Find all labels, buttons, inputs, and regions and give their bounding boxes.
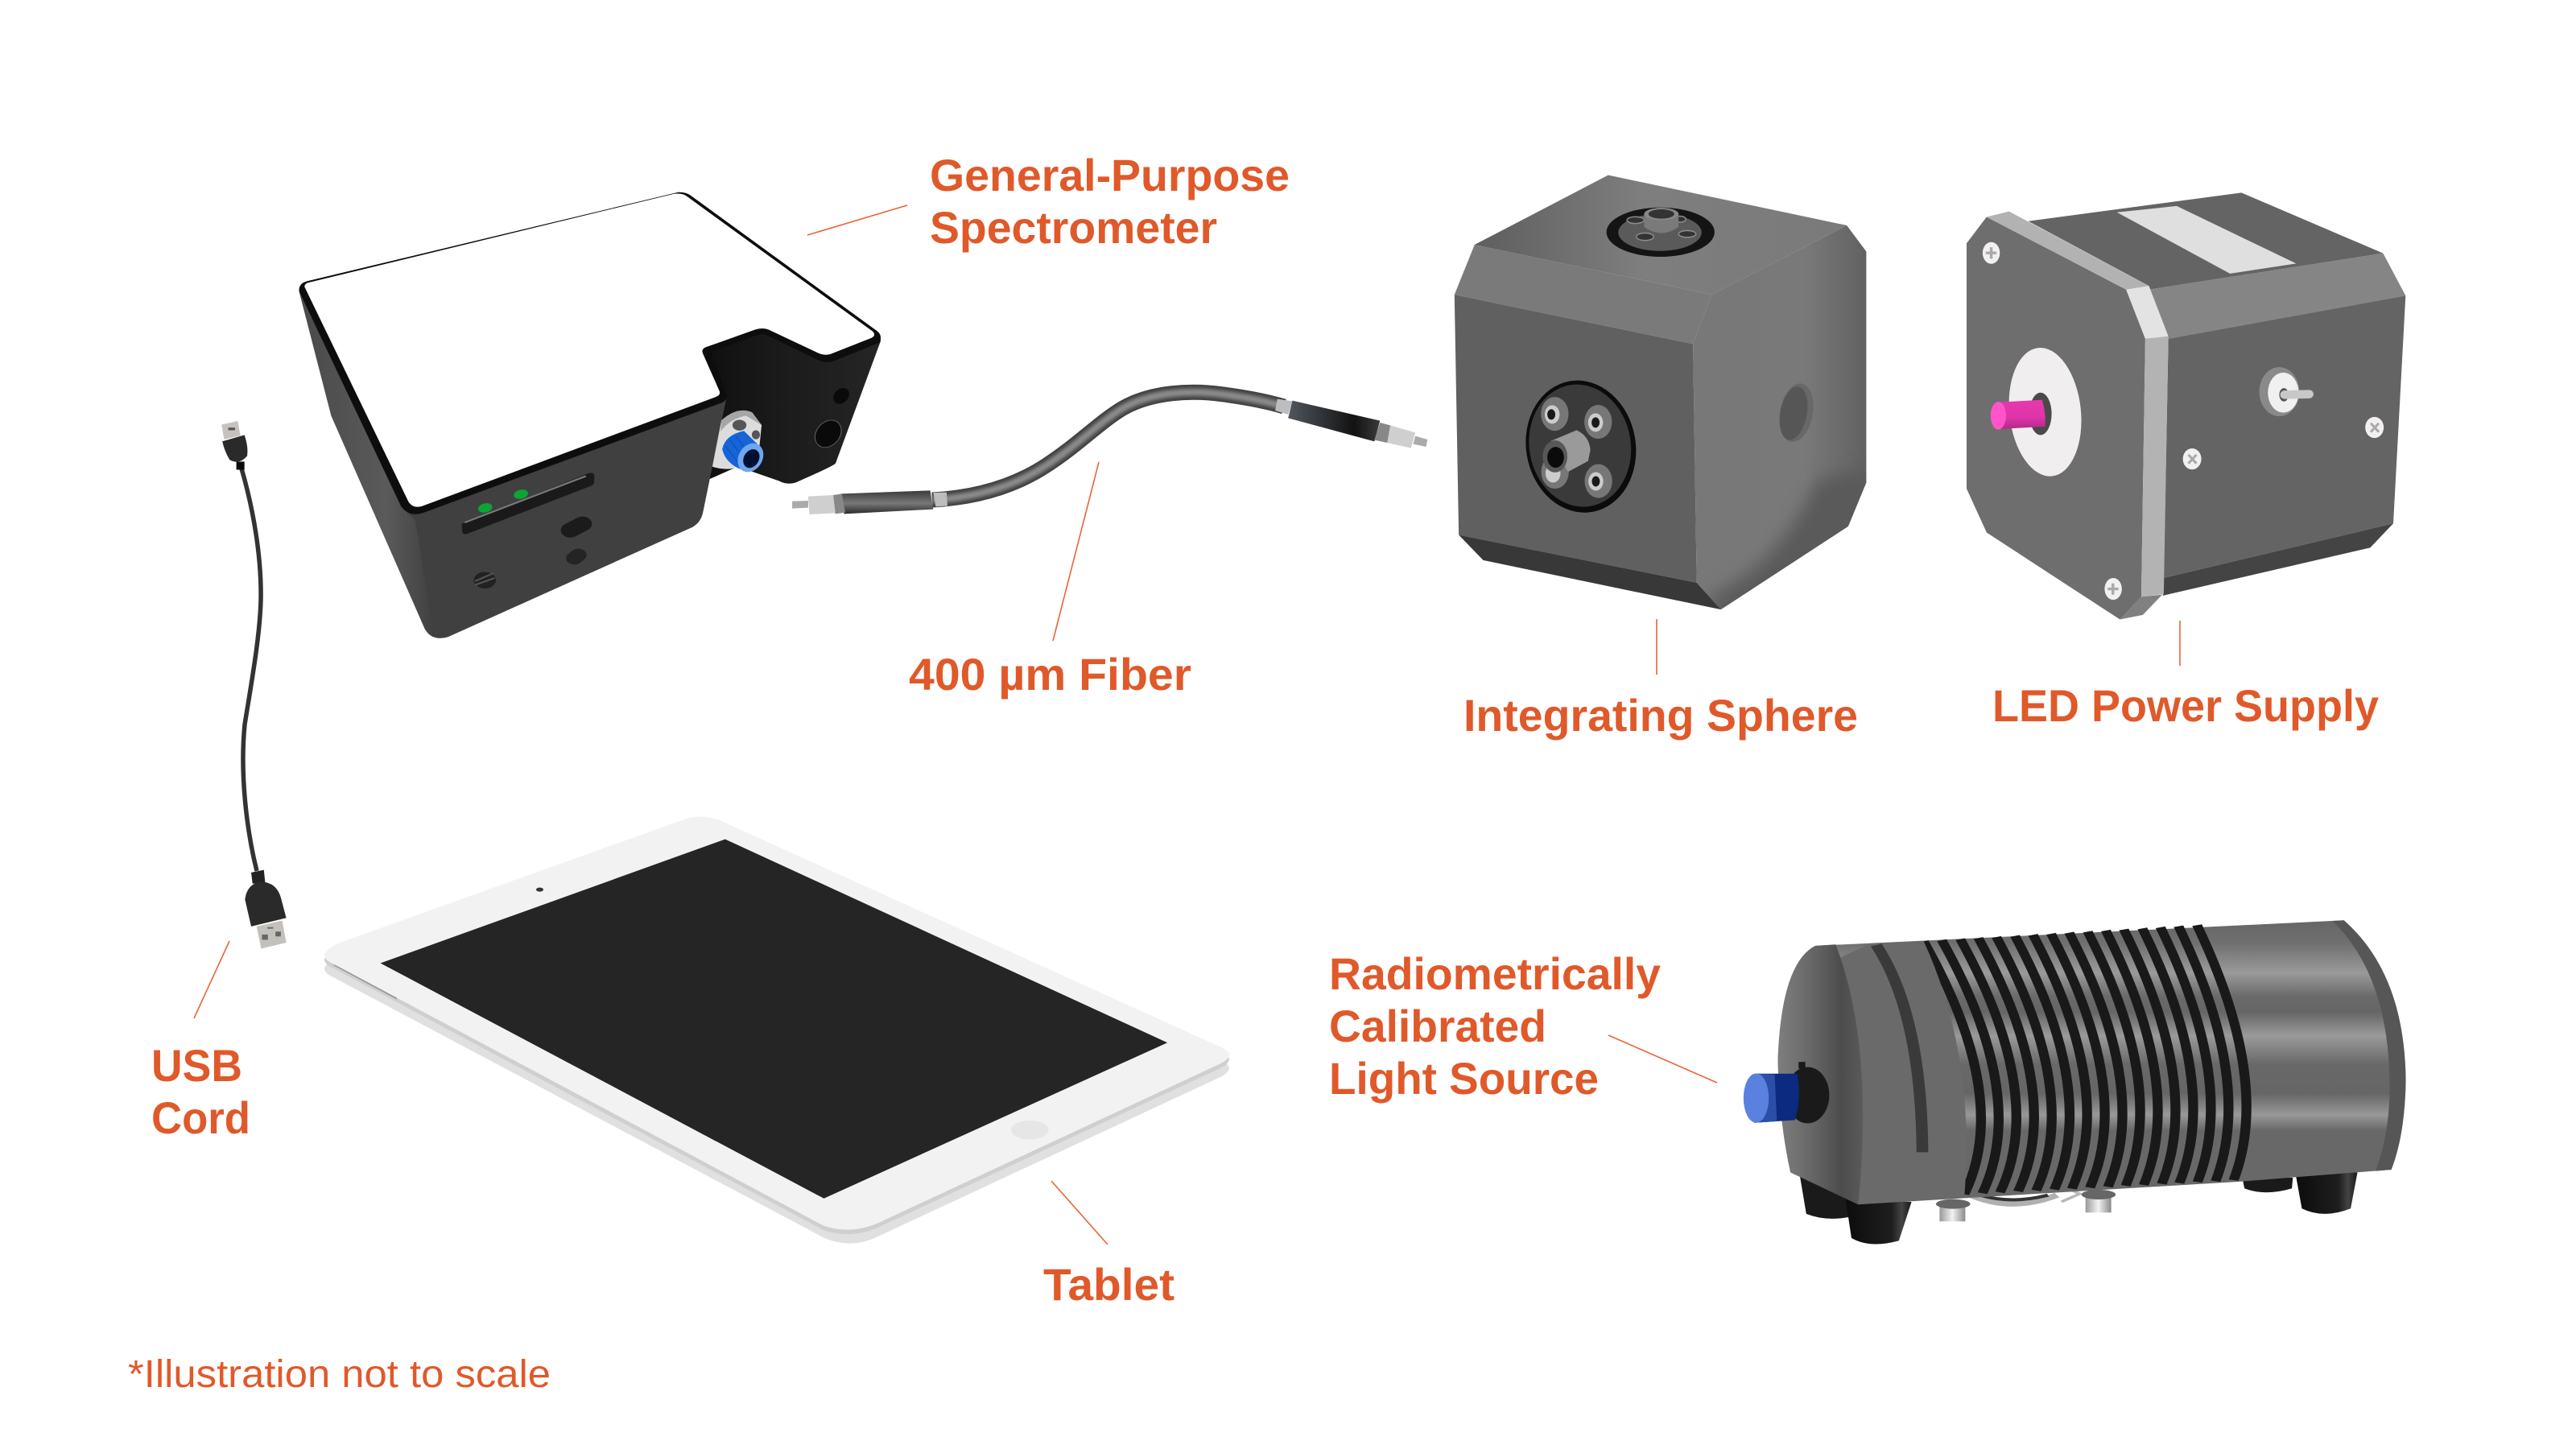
supply front face xyxy=(1967,217,2145,620)
label: light source: Calibrated xyxy=(1329,1001,1546,1051)
sphere top port xyxy=(1607,208,1715,257)
cylinder rear rim xyxy=(2333,920,2406,1171)
leader: light source xyxy=(1608,1035,1717,1083)
sphere right face xyxy=(1693,225,1866,609)
port small xyxy=(574,555,579,558)
label: USB cord: USB xyxy=(151,1040,242,1091)
mounting pins and clip xyxy=(1936,1190,2116,1221)
slot highlight xyxy=(464,476,586,522)
magenta knob xyxy=(1991,400,2046,430)
flange lower edge xyxy=(2120,595,2162,620)
radiometric light source xyxy=(1744,920,2406,1245)
rear small hole xyxy=(831,386,852,406)
spectrometer left side xyxy=(299,291,434,637)
tablet xyxy=(324,816,1229,1244)
collar groove xyxy=(1876,945,1922,1152)
front face xyxy=(1777,944,1863,1204)
LED right xyxy=(512,488,530,501)
label: USB cord: Cord xyxy=(151,1092,250,1143)
lamp cylinder body xyxy=(1777,920,2406,1204)
sphere bottom chamfer xyxy=(1459,535,1721,609)
sphere right face shading xyxy=(1708,467,1866,609)
leader: spectrometer xyxy=(807,205,907,235)
label: tablet: Tablet xyxy=(1043,1259,1174,1310)
end collar xyxy=(1833,941,1967,1204)
label: integrating sphere: Integrating Sphere xyxy=(1463,690,1858,741)
LED left xyxy=(476,502,494,514)
fiber left connector xyxy=(792,490,947,514)
sphere upper chamfer xyxy=(1455,245,1711,344)
rear big hole xyxy=(811,417,846,450)
USB A connector xyxy=(245,870,287,948)
label: General-Purpose Spectrometer: Spectrometer xyxy=(930,202,1217,253)
leader: tablet xyxy=(1051,1181,1108,1245)
supply top face xyxy=(2029,192,2383,290)
flange right edge xyxy=(2141,336,2169,597)
tablet screen xyxy=(381,840,1167,1199)
label: light source: Light Source xyxy=(1329,1053,1599,1104)
blue fiber connector xyxy=(722,431,767,474)
fiber port flange xyxy=(712,411,762,469)
rear feet xyxy=(2242,1172,2357,1214)
USB cable wire xyxy=(242,469,261,871)
tablet lower-left dark sliver xyxy=(333,962,397,1000)
leader: USB xyxy=(194,941,229,1018)
tablet home button xyxy=(1011,1121,1049,1140)
footnote: *Illustration not to scale xyxy=(128,1353,551,1396)
screw side left xyxy=(2183,448,2202,469)
front feet xyxy=(1799,1174,1912,1245)
port pill xyxy=(570,524,583,530)
blue knob assembly xyxy=(1744,1062,1829,1123)
screw hole xyxy=(473,572,496,588)
shaft hole xyxy=(2029,393,2052,435)
white disc xyxy=(2003,345,2087,480)
leader: LED supply xyxy=(2179,621,2181,666)
screw top left xyxy=(1983,242,2000,264)
toggle switch xyxy=(2260,367,2310,416)
tablet front xyxy=(324,816,1229,1230)
fiber cable xyxy=(932,392,1284,500)
LED power supply xyxy=(1967,192,2405,620)
supply label sticker xyxy=(2117,206,2296,274)
spectrometer rear block xyxy=(703,330,881,484)
leader: sphere xyxy=(1656,619,1657,675)
status slot xyxy=(462,473,594,535)
spectrometer white lid xyxy=(304,193,874,507)
sphere front face xyxy=(1455,295,1697,583)
flange corner xyxy=(2126,286,2169,339)
screw bottom xyxy=(2104,578,2122,600)
label: fiber: 400 µm Fiber xyxy=(909,649,1191,700)
supply side face xyxy=(2164,295,2405,578)
spectrometer device xyxy=(299,192,881,638)
label: LED power supply: LED Power Supply xyxy=(1992,680,2379,731)
USB mini connector xyxy=(221,421,247,470)
label: light source: Radiometrically xyxy=(1329,948,1661,999)
supply upper chamfer xyxy=(2149,254,2405,339)
tablet camera xyxy=(536,887,543,892)
flange top edge xyxy=(1987,212,2149,290)
integrating sphere xyxy=(1455,175,1876,634)
sphere top face xyxy=(1475,175,1847,295)
spectrometer top outline xyxy=(299,192,881,514)
sphere side port xyxy=(1775,380,1818,445)
label: General-Purpose Spectrometer: General-Purpose xyxy=(930,150,1290,200)
leader: fiber xyxy=(1053,462,1099,641)
tablet back shadow xyxy=(324,830,1229,1244)
screw side right xyxy=(2365,417,2384,438)
cooling fins xyxy=(1924,925,2247,1195)
spectrometer front body xyxy=(299,291,727,638)
fiber right connector xyxy=(1275,399,1427,448)
sphere front port xyxy=(1512,367,1649,526)
supply bottom chamfer xyxy=(2163,523,2393,596)
tablet side edge xyxy=(324,821,1229,1234)
